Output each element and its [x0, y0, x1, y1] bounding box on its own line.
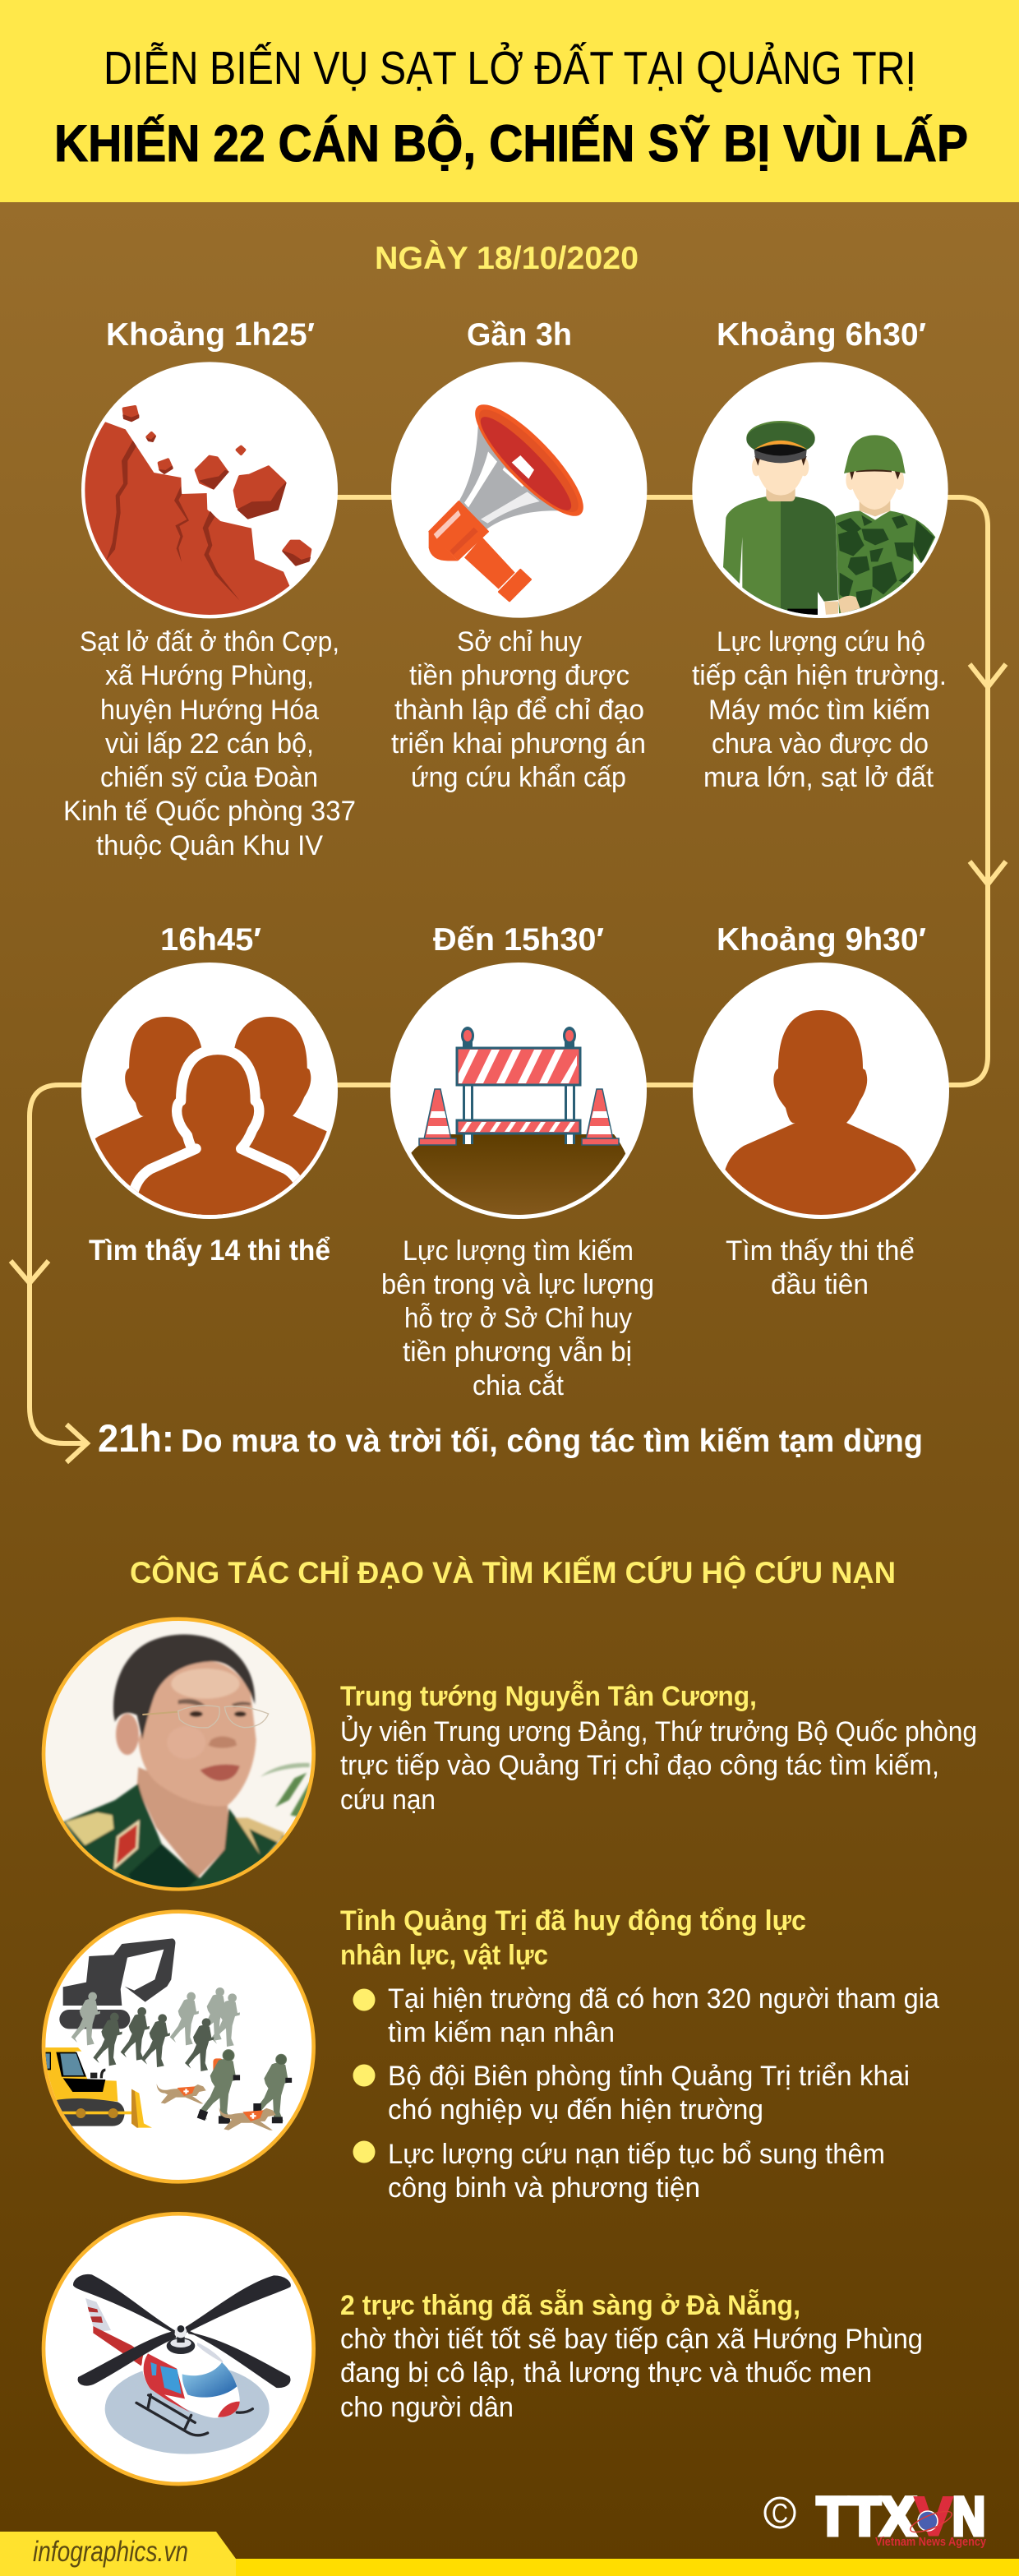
description — [381, 1235, 654, 1401]
event: 16h45 — [81, 927, 338, 1266]
description: Tìm thấy 14 thi thể — [89, 1235, 330, 1267]
time label: Gần 3h — [467, 317, 572, 353]
logo TTXVN: Vietnam News Agency — [875, 2535, 987, 2549]
bullet 2 — [353, 2061, 910, 2126]
description: tiền phương vẫn bị — [403, 1336, 632, 1368]
text — [340, 2289, 923, 2423]
bullet 2: chó nghiệp vụ đến hiện trường — [388, 2094, 763, 2126]
description: Sạt lở đất ở thôn Cợp, — [80, 626, 339, 658]
text: trực tiếp vào Quảng Trị chỉ đạo công tác tìm kiếm, — [340, 1750, 939, 1781]
time label: Đến 15h30′ — [433, 922, 604, 958]
icon: three silhouettes — [81, 963, 338, 1219]
description: xã Hướng Phùng, — [105, 660, 314, 691]
heading — [340, 1905, 806, 1971]
time label: Khoảng 1h25′ — [106, 317, 315, 353]
bullet 3: công binh và phương tiện — [388, 2172, 700, 2204]
description: đầu tiên — [771, 1269, 869, 1300]
event: Khoảng 1h25 — [63, 317, 356, 861]
panel: commander — [44, 1619, 977, 1896]
event: Khoảng 9h30 — [693, 922, 949, 1300]
site tab — [0, 2532, 236, 2576]
copyright: C — [772, 2498, 788, 2528]
text: Trung tướng Nguyễn Tân Cương, — [340, 1681, 757, 1712]
bullet 3: Lực lượng cứu nạn tiếp tục bổ sung thêm — [388, 2139, 885, 2170]
description: chưa vào được do — [712, 728, 929, 759]
text: đang bị cô lập, thả lương thực và thuốc men — [340, 2357, 872, 2389]
text: cứu nạn — [340, 1784, 436, 1816]
description — [726, 1235, 915, 1300]
text: 2 trực thăng đã sẵn sàng ở Đà Nẵng, — [340, 2289, 800, 2321]
text — [340, 1681, 977, 1816]
event: Đến 15h30 — [378, 922, 657, 1401]
logo TTXVN: V — [915, 2486, 952, 2546]
bullet 2: Bộ đội Biên phòng tỉnh Quảng Trị triển khai — [388, 2061, 910, 2092]
section heading: CÔNG TÁC CHỈ ĐẠO VÀ TÌM KIẾM CỨU HỘ CỨU NẠN — [130, 1555, 896, 1590]
description: mưa lớn, sạt lở đất — [703, 762, 934, 793]
text: cho người dân — [340, 2392, 514, 2423]
description: triển khai phương án — [391, 728, 646, 759]
description: Tìm thấy thi thể — [726, 1235, 915, 1267]
bullet 1: tìm kiếm nạn nhân — [388, 2017, 615, 2048]
description: Lực lượng tìm kiếm — [403, 1235, 634, 1267]
description: Sở chỉ huy — [457, 626, 582, 658]
icon: landslide — [74, 362, 338, 627]
time label: 16h45′ — [160, 922, 261, 958]
description — [391, 626, 646, 793]
panel: mobilised forces — [33, 1905, 939, 2204]
description — [692, 626, 947, 793]
description: bên trong và lực lượng — [381, 1269, 654, 1300]
event: Gần 3h — [391, 317, 647, 793]
description: tiếp cận hiện trường. — [692, 660, 947, 691]
description: chiến sỹ của Đoàn — [100, 762, 318, 793]
description: hỗ trợ ở Sở Chỉ huy — [404, 1303, 632, 1334]
bullet 1 — [353, 1983, 939, 2048]
portrait photo — [44, 1619, 315, 1896]
bullet 3 — [353, 2139, 885, 2204]
text: chờ thời tiết tốt sẽ bay tiếp cận xã Hướng Phùng — [340, 2324, 923, 2355]
final event 21h: 21h: — [98, 1416, 174, 1460]
description: vùi lấp 22 cán bộ, — [105, 728, 314, 759]
icon: megaphone — [391, 362, 647, 618]
icon: helicopter — [44, 2214, 314, 2484]
timeline connector — [11, 497, 1006, 1462]
description: thuộc Quân Khu IV — [96, 830, 323, 861]
header banner — [0, 0, 1019, 202]
panel: helicopters — [44, 2214, 923, 2484]
logo TTXVN — [817, 2486, 987, 2549]
description: Kinh tế Quốc phòng 337 — [63, 796, 356, 827]
logo TTXVN: TTX — [817, 2486, 915, 2546]
description: tiền phương được — [409, 660, 629, 691]
bullet 1: Tại hiện trường đã có hơn 320 người tham gia — [388, 1983, 939, 2015]
time label: Khoảng 9h30′ — [717, 922, 926, 958]
site name: infographics.vn — [33, 2536, 188, 2568]
icon: machinery and rescuers — [33, 1912, 314, 2181]
description: huyện Hướng Hóa — [100, 695, 319, 726]
footer — [0, 2486, 1019, 2576]
logo TTXVN: N — [952, 2486, 985, 2546]
event: Khoảng 6h30 — [692, 317, 948, 793]
icon: road barrier with cones — [390, 963, 647, 1219]
description: thành lập để chỉ đạo — [394, 695, 644, 726]
description: Máy móc tìm kiếm — [708, 695, 930, 726]
heading: Tỉnh Quảng Trị đã huy động tổng lực — [340, 1905, 806, 1937]
icon: single silhouette — [693, 963, 949, 1241]
description — [63, 626, 356, 861]
description: Lực lượng cứu hộ — [717, 626, 925, 658]
time label: Khoảng 6h30′ — [717, 317, 926, 353]
date heading: NGÀY 18/10/2020 — [375, 240, 639, 276]
description: chia cắt — [473, 1370, 565, 1401]
text: Ủy viên Trung ương Đảng, Thứ trưởng Bộ Quốc phòng — [340, 1716, 977, 1747]
icon: soldiers — [692, 362, 948, 627]
copyright — [765, 2498, 795, 2528]
heading: nhân lực, vật lực — [340, 1940, 548, 1971]
final event 21h: Do mưa to và trời tối, công tác tìm kiếm tạm dừng — [181, 1424, 923, 1459]
description: ứng cứu khẩn cấp — [411, 762, 626, 793]
